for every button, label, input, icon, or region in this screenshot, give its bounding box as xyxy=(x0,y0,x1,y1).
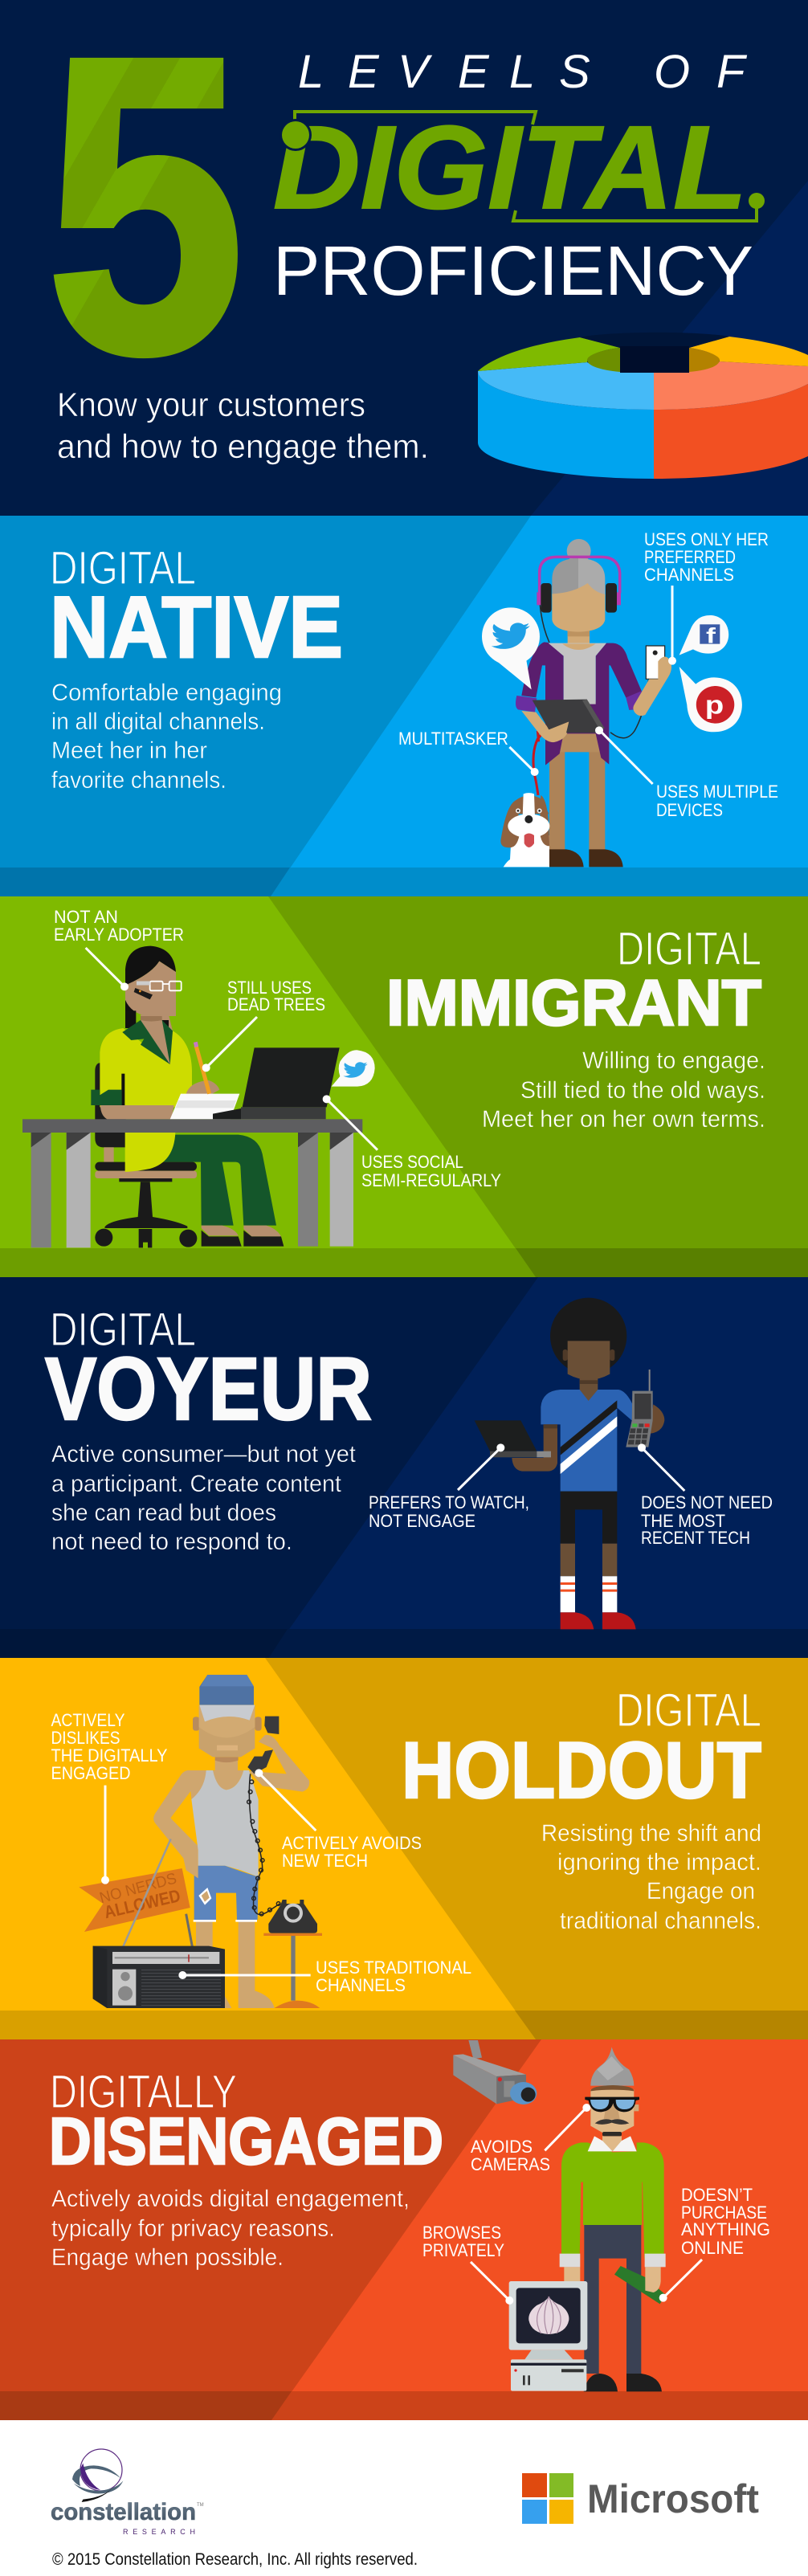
description: holdout: Engage on xyxy=(647,1878,755,1904)
callout: avoids cameras: CAMERAS xyxy=(471,2154,550,2174)
callout: preferred channels: CHANNELS xyxy=(644,565,734,585)
description: immigrant: Still tied to the old ways. xyxy=(520,1077,765,1104)
callout: preferred channels: USES ONLY HER xyxy=(644,529,769,549)
callout: doesn't purchase online: ONLINE xyxy=(681,2238,744,2258)
description: native: in all digital channels. xyxy=(51,708,265,735)
shorts xyxy=(194,1866,259,1922)
sign: no nerds allowed xyxy=(79,1868,190,1932)
callout: avoids cameras xyxy=(471,2137,550,2174)
trousers and shoes xyxy=(584,2223,662,2391)
illustration: young person with laptop and brick phone xyxy=(458,1298,684,1629)
callout: doesn't purchase online: PURCHASE xyxy=(681,2202,767,2223)
callout: dead trees: STILL USES xyxy=(227,978,312,998)
callout: browses privately xyxy=(422,2223,504,2260)
logo: constellation research: constellation xyxy=(51,2499,196,2525)
callout: social semi-regularly xyxy=(361,1152,501,1190)
callout: dead trees xyxy=(227,978,325,1014)
illustration: woman at desk xyxy=(22,946,377,1247)
description: disengaged xyxy=(51,2186,410,2271)
phone and right hand xyxy=(633,646,671,716)
panel: digital voyeur xyxy=(0,1277,808,1659)
heading: digital holdout xyxy=(402,1684,761,1815)
callout: most recent tech: THE MOST xyxy=(641,1511,725,1531)
torso and left arm xyxy=(153,1770,259,1878)
heading: digital voyeur: VOYEUR xyxy=(45,1340,372,1439)
heading: digitally disengaged: DIGITALLY xyxy=(50,2066,237,2118)
head and cap xyxy=(193,1675,262,1775)
hair and bun xyxy=(552,539,605,596)
panel: footer xyxy=(0,2420,808,2576)
callout: most recent tech: DOES NOT NEED xyxy=(641,1492,773,1513)
laptop xyxy=(213,1047,340,1119)
heading: digitally disengaged xyxy=(49,2066,443,2178)
chair seat and jacket skirt xyxy=(95,1133,197,1178)
callout leader lines xyxy=(509,586,676,784)
callout leader lines xyxy=(86,948,377,1150)
heading: digital native: DIGITAL xyxy=(50,542,196,594)
description: voyeur: not need to respond to. xyxy=(51,1529,292,1555)
cardigan and shirt xyxy=(516,642,642,765)
panel: digital holdout xyxy=(0,1658,808,2039)
heading: digital native xyxy=(50,542,343,676)
dog leash xyxy=(533,729,547,795)
callout: browses privately: BROWSES xyxy=(422,2223,501,2243)
callout: traditional channels: CHANNELS xyxy=(316,1975,406,1995)
description: native: Comfortable engaging xyxy=(51,680,282,706)
description: native xyxy=(51,680,282,794)
callout: not an early adopter: NOT AN xyxy=(54,907,118,927)
subtitle: Know your customers xyxy=(57,386,365,423)
callout: not an early adopter: EARLY ADOPTER xyxy=(54,925,184,945)
callout: prefers to watch: NOT ENGAGE xyxy=(369,1511,475,1531)
callout: doesn't purchase online xyxy=(681,2185,770,2258)
jacket xyxy=(91,1020,192,1119)
trousers and shoes xyxy=(158,1135,284,1247)
logo: microsoft: Microsoft xyxy=(587,2476,759,2521)
callout: avoids new tech: ACTIVELY AVOIDS xyxy=(282,1833,422,1853)
legs xyxy=(196,1920,275,2008)
description: immigrant: Meet her on her own terms. xyxy=(482,1106,765,1133)
callout: dislikes digitally engaged: THE DIGITALLY xyxy=(51,1745,168,1766)
face and neck xyxy=(125,961,176,1064)
heading: digital immigrant: DIGITAL xyxy=(617,923,761,975)
callout: prefers to watch: PREFERS TO WATCH, xyxy=(369,1492,529,1513)
callout: most recent tech: RECENT TECH xyxy=(641,1528,750,1548)
copyright: © 2015 Constellation Research, Inc. All rights reserved. xyxy=(52,2550,418,2569)
description: immigrant xyxy=(482,1047,765,1133)
description: voyeur: Active consumer—but not yet xyxy=(51,1441,357,1468)
icon: twitter bubble xyxy=(332,1050,375,1087)
notepad and pencil xyxy=(170,1042,239,1119)
sweater with collar xyxy=(561,2136,664,2259)
callout: avoids cameras: AVOIDS xyxy=(471,2137,533,2157)
callout leader lines xyxy=(458,1443,684,1491)
callout leader lines xyxy=(471,2104,702,2305)
description: holdout: traditional channels. xyxy=(560,1908,761,1934)
callout: dislikes digitally engaged: ENGAGED xyxy=(51,1763,130,1783)
brick phone xyxy=(626,1370,653,1447)
left arm and laptop xyxy=(475,1420,557,1472)
heading: digital voyeur: DIGITAL xyxy=(50,1304,196,1356)
callout: dislikes digitally engaged: ACTIVELY xyxy=(51,1710,125,1730)
description: native: favorite channels. xyxy=(51,767,226,794)
hair and head xyxy=(550,1298,626,1392)
title: proficiency: PROFICIENCY xyxy=(273,232,753,310)
panel: digital native xyxy=(0,516,808,896)
icon: pinterest bubble xyxy=(679,667,742,732)
title: levels of: LEVELS OF xyxy=(298,46,748,98)
description: holdout: Resisting the shift and xyxy=(541,1820,761,1847)
security camera xyxy=(453,2040,537,2104)
legs and shoes xyxy=(549,733,623,867)
chair xyxy=(95,1063,197,1247)
headphones xyxy=(537,557,621,643)
subtitle: and how to engage them. xyxy=(57,427,429,465)
headphone cable xyxy=(610,680,648,738)
description: holdout: ignoring the impact. xyxy=(557,1849,761,1876)
icon: facebook bubble xyxy=(679,615,728,655)
description: voyeur: a participant. Create content xyxy=(51,1471,342,1497)
description: disengaged: Engage when possible. xyxy=(51,2244,284,2271)
donut chart xyxy=(478,333,808,479)
description: voyeur: she can read but does xyxy=(51,1500,276,1526)
description: holdout xyxy=(541,1820,761,1934)
heading: digitally disengaged: DISENGAGED xyxy=(49,2104,443,2178)
phone receiver and cord xyxy=(247,1717,280,1916)
logo: constellation research: TM xyxy=(197,2503,204,2508)
callout: avoids new tech xyxy=(282,1833,422,1871)
callout: social semi-regularly: SEMI-REGULARLY xyxy=(361,1170,501,1190)
callout: doesn't purchase online: ANYTHING xyxy=(681,2219,770,2239)
shirt with stripes xyxy=(541,1390,633,1492)
callout: dislikes digitally engaged xyxy=(51,1710,168,1783)
radio xyxy=(93,1839,225,2008)
icon: pinterest bubble: p xyxy=(705,691,724,720)
callout leader lines xyxy=(101,1769,316,1979)
heading: digital immigrant xyxy=(386,923,761,1039)
callout: dislikes digitally engaged: DISLIKES xyxy=(51,1728,120,1748)
callout: prefers to watch xyxy=(369,1492,529,1531)
computer with onion browser xyxy=(509,2281,587,2391)
icon: facebook bubble: f xyxy=(706,623,716,648)
callout: multiple devices: USES MULTIPLE xyxy=(656,782,778,802)
description: immigrant: Willing to engage. xyxy=(582,1047,765,1074)
callout: traditional channels: USES TRADITIONAL xyxy=(316,1958,471,1978)
right arm xyxy=(249,1735,309,1792)
rotary phone on table xyxy=(263,1900,322,2008)
illustration: man with rotary phone and radio xyxy=(79,1675,322,2008)
tablet and left hand xyxy=(521,700,605,742)
callout: multiple devices: DEVICES xyxy=(656,800,723,820)
callout: social semi-regularly: USES SOCIAL xyxy=(361,1152,463,1172)
logo: microsoft xyxy=(522,2473,759,2524)
description: disengaged: Actively avoids digital engagement, xyxy=(51,2186,410,2212)
illustration: man in foil hat with computer and cash xyxy=(453,2040,702,2391)
logo: constellation research xyxy=(51,2449,204,2536)
desk xyxy=(22,1119,362,1247)
title: digital: DIGITAL xyxy=(273,102,747,234)
callout: multitasker: MULTITASKER xyxy=(398,729,508,749)
callout: browses privately: PRIVATELY xyxy=(422,2240,504,2260)
right hand xyxy=(649,1404,664,1434)
callout: most recent tech xyxy=(641,1492,773,1548)
description: voyeur xyxy=(51,1441,357,1555)
logo: constellation research: RESEARCH xyxy=(123,2528,195,2536)
heading: digital holdout: DIGITAL xyxy=(616,1684,761,1737)
heading: digital native: NATIVE xyxy=(50,578,343,676)
sign: no nerds allowed: NO NERDS xyxy=(98,1870,178,1907)
cash and hands xyxy=(560,2254,666,2304)
illustration: grandmother with devices and dog xyxy=(482,539,676,867)
social bubbles xyxy=(679,615,742,732)
description: native: Meet her in her xyxy=(51,737,207,764)
callout: traditional channels xyxy=(316,1958,471,1995)
callout: dead trees: DEAD TREES xyxy=(227,994,325,1014)
panel: digital immigrant xyxy=(0,896,808,1277)
callout: preferred channels: PREFERRED xyxy=(644,547,736,567)
sign: no nerds allowed: ALLOWED xyxy=(102,1885,182,1922)
glasses and headset xyxy=(134,982,182,999)
subtitle xyxy=(57,386,429,465)
icon: twitter bubble xyxy=(482,607,540,689)
callout: preferred channels xyxy=(644,529,769,585)
panel: header xyxy=(0,0,808,516)
callout: not an early adopter xyxy=(54,907,184,945)
callout: multiple devices xyxy=(656,782,778,820)
heading: digital holdout: HOLDOUT xyxy=(402,1725,761,1815)
heading: digital immigrant: IMMIGRANT xyxy=(386,967,761,1039)
heading: digital voyeur xyxy=(45,1304,372,1439)
callout: avoids new tech: NEW TECH xyxy=(282,1851,368,1871)
description: disengaged: typically for privacy reasons. xyxy=(51,2215,335,2242)
foil hat and head xyxy=(585,2047,639,2151)
callout: doesn't purchase online: DOESN’T xyxy=(681,2185,753,2205)
dog xyxy=(500,793,549,867)
face and neck xyxy=(552,583,605,645)
hair xyxy=(125,946,176,1028)
panel: digitally disengaged xyxy=(0,2039,808,2420)
shorts, legs and shoes xyxy=(561,1492,636,1629)
